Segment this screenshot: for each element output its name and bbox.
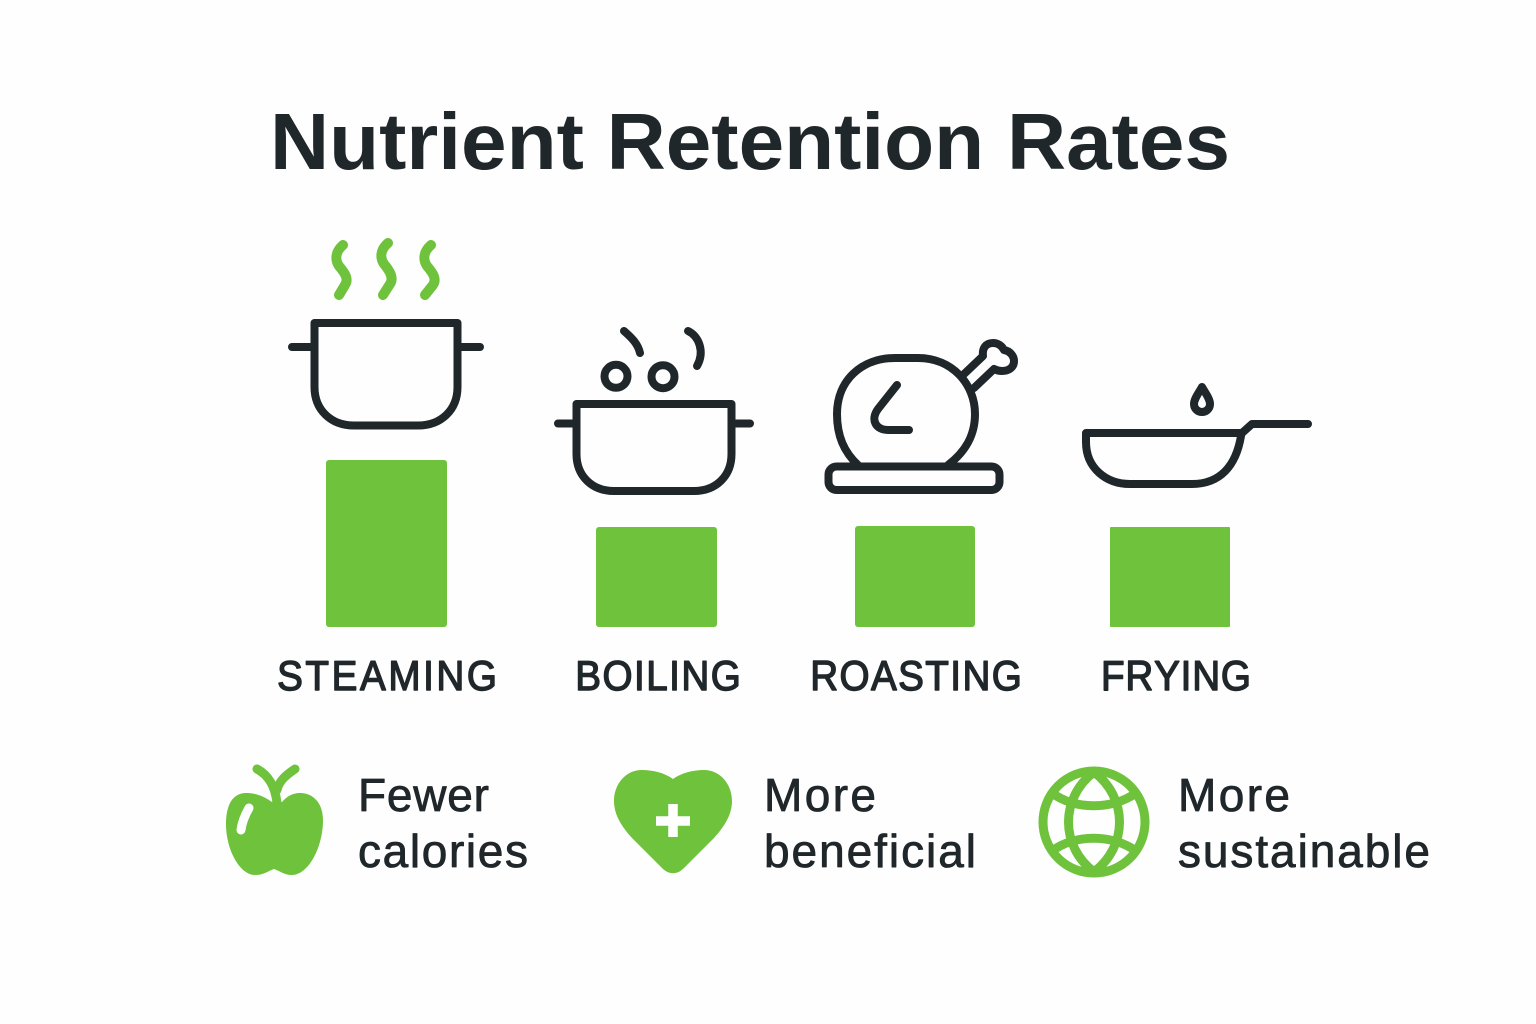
text: more beneficial: beneficial [764, 825, 976, 877]
text: fewer calories [358, 769, 528, 877]
icon: heart with plus [614, 770, 732, 873]
icon: boiling pot [558, 331, 750, 491]
bar: frying [1110, 527, 1230, 627]
icon: apple [226, 769, 323, 875]
text: more sustainable [1178, 769, 1430, 877]
label: steaming: STEAMING [277, 651, 497, 699]
bar: boiling [596, 527, 717, 627]
bar: roasting [855, 526, 975, 627]
icon: roast chicken [828, 343, 1014, 490]
icon: steam [336, 243, 435, 295]
title: Nutrient Retention Rates [270, 97, 1230, 186]
text: fewer calories: Fewer [358, 769, 489, 821]
text: more beneficial [764, 769, 976, 877]
text: more beneficial: More [764, 769, 876, 821]
bar: steaming [326, 460, 447, 627]
icon: steaming pot [292, 323, 480, 426]
text: more sustainable: More [1178, 769, 1290, 821]
icon: frying pan [1086, 387, 1308, 484]
text: more sustainable: sustainable [1178, 825, 1430, 877]
text: fewer calories: calories [358, 825, 528, 877]
label: boiling: BOILING [575, 651, 741, 699]
label: roasting: ROASTING [810, 651, 1022, 699]
icon: globe [1043, 771, 1145, 873]
label: frying: FRYING [1101, 651, 1251, 699]
